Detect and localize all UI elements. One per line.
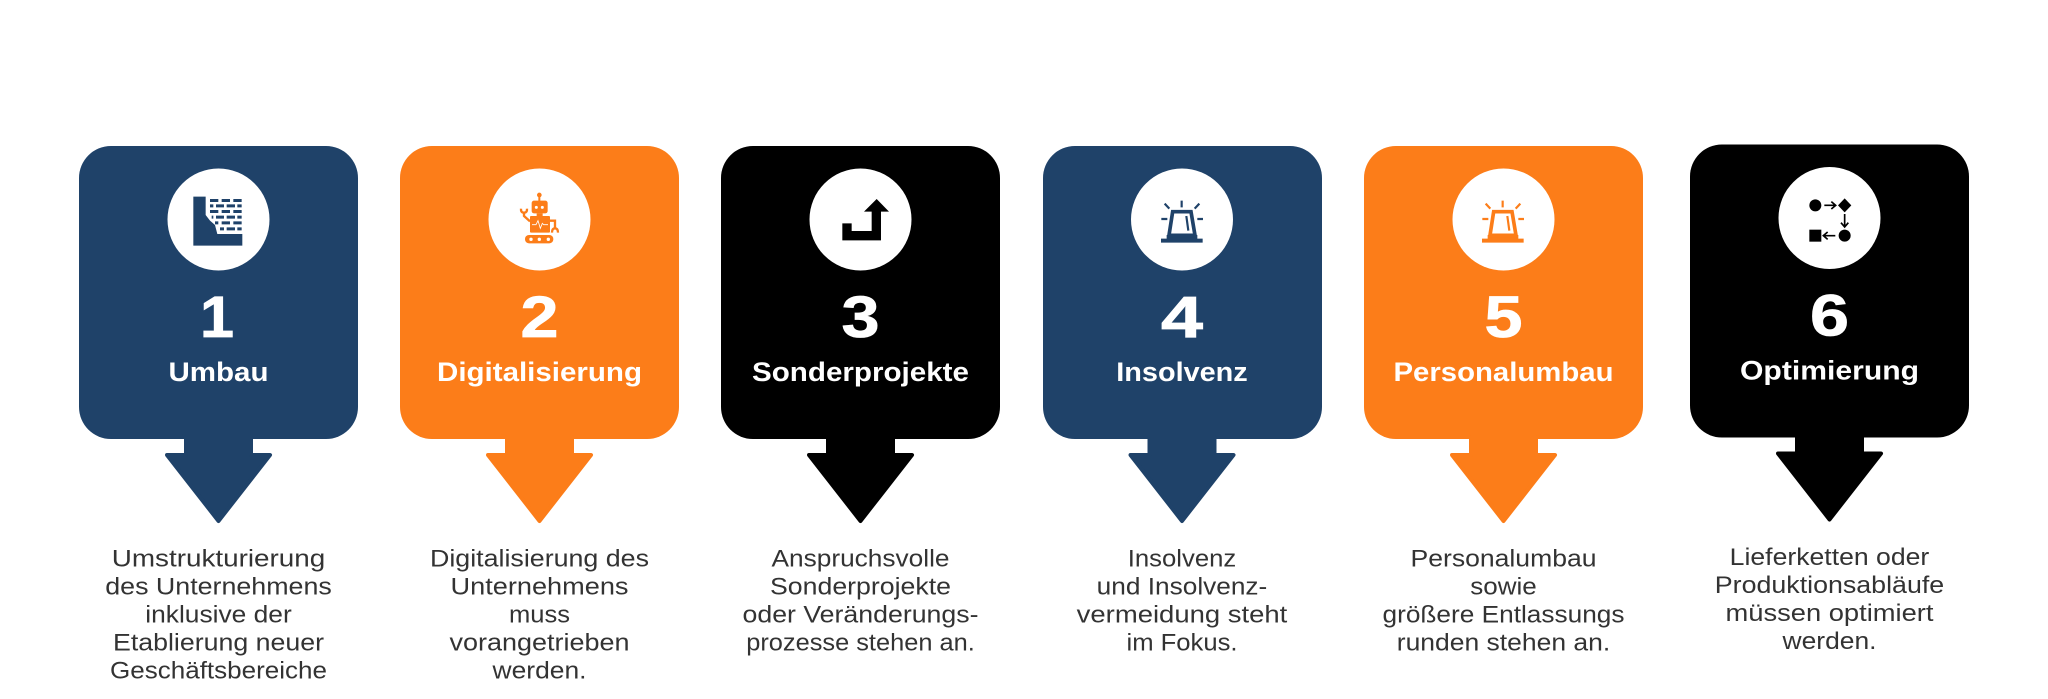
number 5: 5 [1484,285,1522,350]
text: Optimierung description: werden. [1781,628,1876,655]
text: Insolvenz description: im Fokus. [1126,630,1238,657]
arrow: Sonderprojekte [809,437,912,521]
heading: Digitalisierung: Digitalisierung [437,357,642,387]
text: Digitalisierung description: muss [509,602,570,629]
text: Sonderprojekte description: prozesse stehen an. [746,630,975,657]
card: Umbau [79,146,358,439]
heading: Personalumbau: Personalumbau [1394,357,1614,387]
text: Sonderprojekte description: Anspruchsvolle [772,546,950,573]
text: Personalumbau description: sowie [1470,574,1537,601]
text: Insolvenz description [1077,546,1288,657]
icon: process flow [1778,167,1880,269]
text: Personalumbau description [1382,546,1624,657]
icon: brick wall [168,168,270,270]
text: Digitalisierung description: Unternehmens [450,574,628,601]
arrow: Digitalisierung [488,437,591,521]
number 3: 3 [842,285,880,350]
card: Sonderprojekte [721,146,1000,439]
text: Insolvenz description: und Insolvenz- [1097,574,1267,601]
heading: Insolvenz: Insolvenz [1116,357,1248,387]
panel: Optimierung [1690,144,1969,655]
text: Sonderprojekte description [742,546,978,657]
number 1: 1 [200,285,234,350]
number 4: 4 [1161,285,1203,350]
number 6: 6 [1810,284,1849,348]
arrow: Personalumbau [1452,437,1555,521]
panel: Sonderprojekte [721,146,1000,657]
text: Digitalisierung description [430,546,649,685]
text: Insolvenz description: Insolvenz [1128,546,1236,573]
text: Digitalisierung description: vorangetrieben [450,630,630,657]
heading: Umbau: Umbau [168,357,268,387]
text: Insolvenz description: vermeidung steht [1077,602,1288,629]
text: Umbau description: Umstrukturierung [112,546,325,573]
text: Umbau description: Etablierung neuer [113,630,324,657]
panel: Digitalisierung [400,146,679,685]
icon: robot [488,168,590,270]
card: Insolvenz [1043,146,1322,439]
arrow: Umbau [167,437,270,521]
text: Optimierung description: Lieferketten oder [1730,544,1929,571]
panel: Personalumbau [1364,146,1643,657]
text: Umbau description: inklusive der [145,602,292,629]
text: Optimierung description [1715,544,1944,655]
text: Umbau description: Geschäftsbereiche [110,658,327,685]
text: Sonderprojekte description: oder Veränderungs- [742,602,978,629]
arrow: Optimierung [1778,436,1881,520]
heading: Sonderprojekte: Sonderprojekte [752,357,969,387]
number 2: 2 [520,285,558,350]
panel: Insolvenz [1043,146,1322,657]
icon: turn-up arrow [810,168,912,270]
icon: siren [1452,168,1554,270]
heading: Optimierung: Optimierung [1740,356,1919,386]
icon: siren [1131,168,1233,270]
text: Optimierung description: Produktionsabläufe [1715,572,1944,599]
panel: Umbau [79,146,358,685]
text: Digitalisierung description: werden. [491,658,586,685]
text: Digitalisierung description: Digitalisierung des [430,546,649,573]
arrow: Insolvenz [1130,437,1234,521]
text: Personalumbau description: runden stehen an. [1397,630,1610,657]
text: Umbau description [105,546,332,685]
card: Digitalisierung [400,146,679,439]
card: Personalumbau [1364,146,1643,439]
text: Sonderprojekte description: Sonderprojekte [770,574,951,601]
text: Personalumbau description: größere Entlassungs [1382,602,1624,629]
text: Personalumbau description: Personalumbau [1410,546,1596,573]
card: Optimierung [1690,144,1969,438]
text: Optimierung description: müssen optimiert [1726,600,1934,627]
text: Umbau description: des Unternehmens [105,574,332,601]
